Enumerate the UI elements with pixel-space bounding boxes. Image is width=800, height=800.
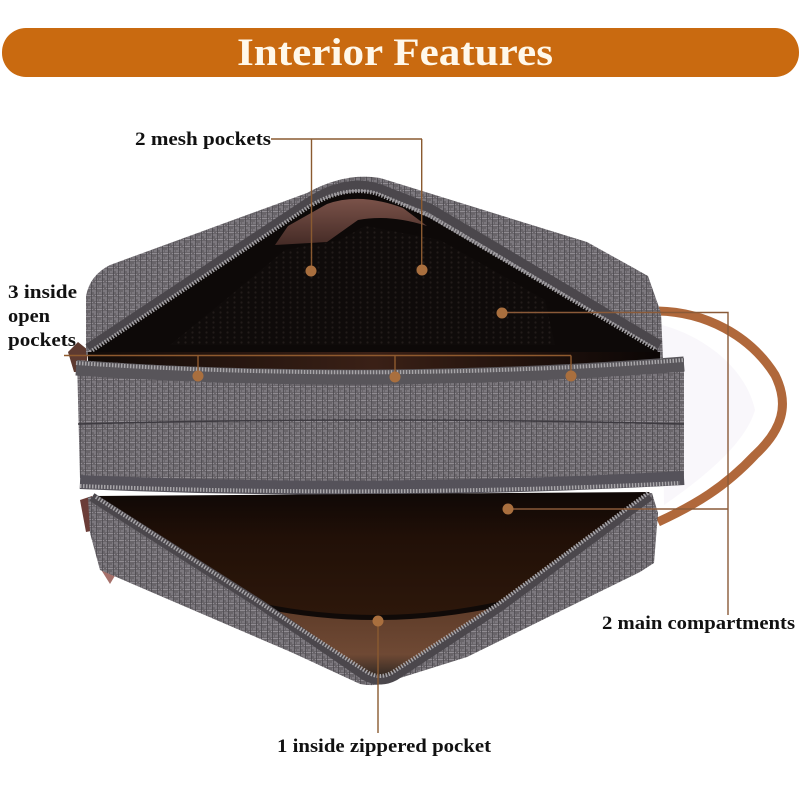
upper zipper edge: [88, 185, 660, 352]
zippered pocket: [262, 604, 500, 676]
product photo: toiletry bag: [68, 177, 782, 685]
callout: 1 inside zippered pocket: [277, 616, 492, 757]
callout: 3 inside open pockets: 3 inside: [8, 282, 77, 303]
callout: 1 inside zippered pocket: 1 inside zippered pocket: [277, 736, 492, 757]
callout: 2 mesh pockets: 2 mesh pockets: [135, 129, 271, 150]
center gusset: [77, 358, 684, 485]
lower compartment opening: [95, 492, 650, 675]
callout: 2 main compartments: 2 main compartments: [602, 613, 795, 634]
brown inner strip: [88, 352, 660, 377]
lower flap: [88, 493, 658, 685]
center zippers: [76, 360, 684, 491]
callout: 3 inside open pockets: open: [8, 306, 50, 327]
title banner: Interior Features: [237, 31, 553, 74]
mesh pockets: [170, 226, 555, 345]
callout: 2 mesh pockets: [135, 129, 428, 276]
callout: 2 main compartments: [496, 308, 795, 634]
upper compartment opening: [90, 192, 660, 362]
title banner: [2, 28, 799, 77]
lower zipper edge: [92, 493, 650, 680]
leather handle: [658, 311, 782, 522]
upper flap: [86, 177, 663, 358]
mauve back panel: [275, 199, 427, 245]
callout: 3 inside open pockets: [8, 282, 576, 382]
faint shadow behind handle: [662, 325, 755, 505]
left side leather tabs: [68, 342, 116, 584]
callout: 3 inside open pockets: pockets: [8, 330, 76, 351]
